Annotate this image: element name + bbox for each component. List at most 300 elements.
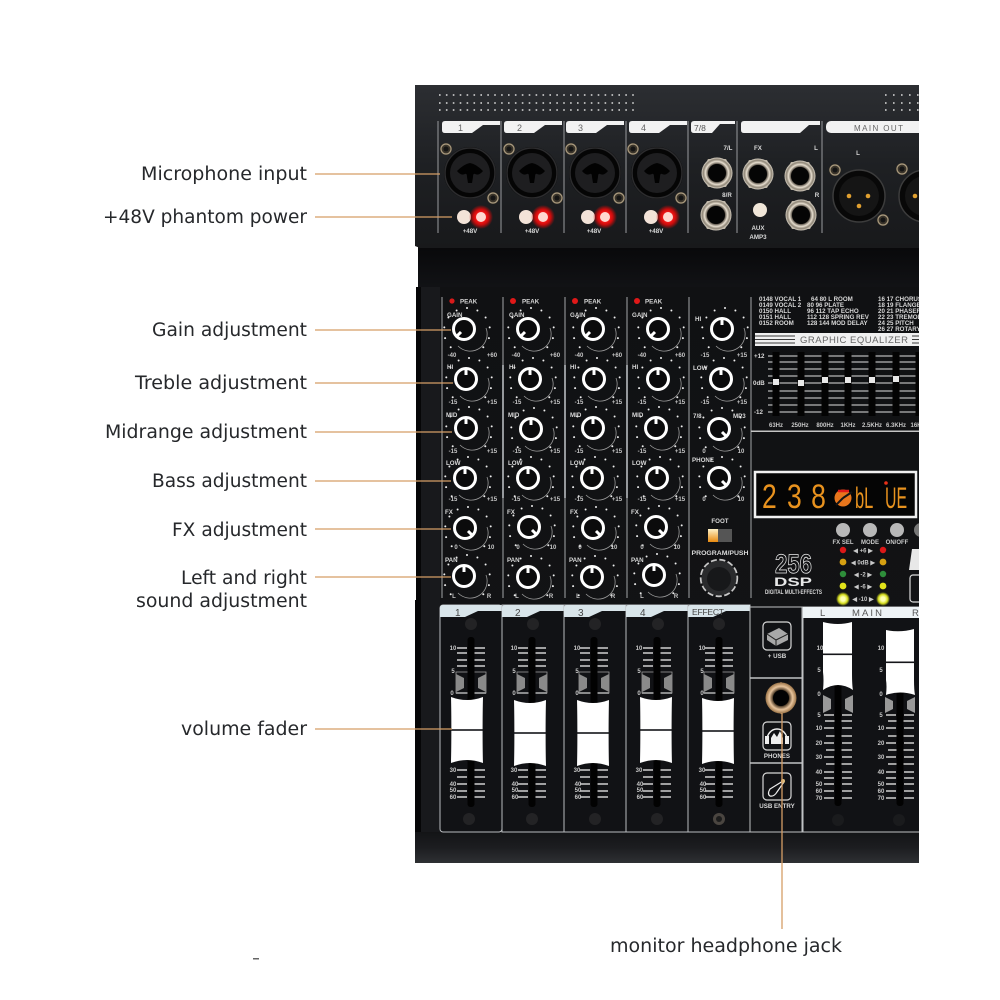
main tab [803,607,919,619]
fader strip 4: 5 [637,669,641,675]
knob: gain 2: +60 [550,353,561,359]
channel 2 input: 2 [517,123,522,133]
graphic equalizer heading: GRAPHIC EQUALIZER [800,335,908,346]
fader strip 2: 60 [512,795,519,801]
centre utility column [750,607,802,832]
effects preset list: 24 25 PITCH [878,320,914,327]
knob: pan 1: R [487,594,492,600]
knob: FX 1 [444,506,495,551]
level meter: ◀ -10 ▶ [851,596,874,603]
fader strip 1: 50 [450,788,457,794]
knob: FX 3: FX [570,509,579,516]
knob: gain 4: GAIN [632,312,648,319]
fader strip 1: 1 [455,608,461,619]
LED display: 238 [762,478,826,516]
knob: FX 2 [507,505,557,551]
effects preset list: 0150 HALL [759,308,791,315]
effect buttons [832,523,928,546]
callout label: Midrange adjustment: Midrange adjustment [105,422,307,443]
knob: treble 1: HI [447,364,453,371]
fader strip 4 [626,605,688,832]
fader strip effect: 60 [700,795,707,801]
256 DSP logo: DSP [774,575,812,589]
knob: bass 4 [632,456,686,503]
knob: FX 2: 10 [550,545,557,551]
left main fader: 70 [816,796,823,802]
fader strip 4: 60 [637,795,644,801]
peak LED 2: PEAK [522,298,540,306]
knob: mid 3 [570,406,623,455]
knob: mid 2: MID [508,412,520,419]
knob: pan 3: R [611,594,616,600]
callout label: Bass adjustment: Bass adjustment [152,471,307,492]
effect buttons: ON/OFF [886,540,909,546]
callout label: +48V phantom power: +48V phantom power [103,207,307,228]
knob: bass 3 [570,456,623,503]
program push encoder: PROGRAM/PUSH [692,550,749,557]
FX and auxiliary jacks: AMP3 [749,234,767,241]
right main fader: 50 [878,782,885,788]
FX and auxiliary jacks: AUX [751,225,765,232]
knob: mid 3: +15 [612,449,623,455]
graphic equalizer faders: 2.5KHz [862,423,882,429]
right main fader: 20 [878,741,885,747]
main tab: MAIN [852,608,882,619]
effect buttons: FX SEL [832,540,854,546]
knob: treble 4: -15 [638,400,647,406]
left main fader: 30 [816,755,823,761]
knob: effect low: LOW [693,365,708,372]
knob: 7/8 MP3: 10 [738,449,745,455]
256 DSP logo [765,549,822,596]
right edge icons [909,549,924,602]
knob: FX 1: 10 [488,545,495,551]
fader strip 4: 4 [640,608,646,619]
knob: FX 3: 0 [578,545,582,551]
knob: gain 1: GAIN [447,312,463,319]
knob: gain 3: +60 [612,353,623,359]
FX and auxiliary jacks [741,121,820,241]
fader strip 4: 40 [637,782,644,788]
effects preset list: 0148 VOCAL 1 [759,296,802,303]
main out XLR [826,121,951,226]
channel 3 input [565,121,625,235]
knob: treble 1: -15 [449,400,458,406]
fader strip 1: 60 [450,795,457,801]
fader strip 3: 30 [574,768,581,774]
knob: mid 1 [445,406,498,455]
level meter: ◀ -2 ▶ [853,572,872,578]
knob: pan 3: L [576,594,580,600]
graphic equalizer heading [755,333,919,346]
knob: FX 1: 0 [454,545,458,551]
knob: bass 2: LOW [508,460,523,467]
main tab: R [912,608,919,619]
effects preset list: 128 144 MOD DELAY [807,320,869,327]
level meter [836,547,890,606]
knob: bass 3: +15 [612,497,623,503]
main tab: L [820,608,825,619]
knob: bass 4: LOW [632,460,647,467]
knob: pan 2: L [515,594,519,600]
fader strip 3 [564,605,626,832]
knob: phones: PHONE [692,457,714,464]
left main fader [816,622,853,826]
fader strip 2: 2 [515,608,521,619]
knob: mid 4: -15 [638,449,647,455]
knob: gain 4: -40 [638,353,647,359]
knob: gain 3 [570,307,623,359]
knob: mid 2: -15 [513,449,522,455]
panel: left body edge [415,287,421,833]
mixer body [415,85,926,863]
graphic equalizer faders: 250Hz [791,423,809,429]
graphic equalizer faders: 0dB [753,380,765,387]
knob: effect low [693,357,748,406]
leader: phantom power [315,216,452,218]
fader cap 3 [577,700,609,766]
level meter: ◀ 0dB ▶ [850,560,875,566]
knob: treble 3: -15 [575,400,584,406]
leader: midrange [315,431,452,433]
fader strip 1: 40 [450,782,457,788]
knob: effect low: -15 [701,400,710,406]
graphic equalizer faders: 1KHz [840,423,856,429]
callout label: Left and right sound adjustment: sound adjustment [136,591,307,612]
knob: bass 3: -15 [575,497,584,503]
FX and auxiliary jacks: R [815,192,820,199]
knob: mid 4 [632,406,686,455]
fader strip 4: 0 [637,691,641,697]
effects preset list: 0152 ROOM [759,320,794,327]
channel 1 input [440,121,500,235]
right main fader: 40 [878,770,885,776]
leader: treble [315,382,453,384]
small stray mark [253,958,259,960]
channel 2 input [503,121,563,235]
panel: top connector panel [415,85,951,248]
knob: mid 4: +15 [675,449,686,455]
knob: pan 4: L [640,594,644,600]
effects preset list: 18 19 FLANGE [878,302,921,309]
fader cap effect [702,698,734,764]
knob: treble 3: +15 [612,400,623,406]
fader strip 2: 40 [512,782,519,788]
knob: treble 2: +15 [550,400,561,406]
knob: pan 3 [569,555,619,600]
fader strip 3: 10 [574,646,581,652]
256 DSP logo: DIGITAL MULTI-EFFECTS [765,589,822,596]
graphic equalizer faders: 800Hz [816,423,834,429]
right main fader: 10 [878,726,885,732]
knob: pan 2 [507,555,555,600]
leader lines [315,174,782,929]
fader cap 1 [451,697,483,763]
knob: FX 4: 0 [640,545,644,551]
knob: pan 2: R [549,594,554,600]
fader strip 2: 0 [512,691,516,697]
knob: pan 1: L [452,594,456,600]
knob: mid 1: -15 [449,449,458,455]
icon caption: USB: + USB [768,653,787,660]
fader strip effect: 10 [699,646,706,652]
fader strip 3: 3 [578,608,584,619]
callout label: volume fader: volume fader [181,719,307,740]
knob: gain 4: +60 [675,353,686,359]
channel 2 knobs [507,298,561,600]
knob: treble 3: HI [570,364,576,371]
knob: bass 3: LOW [570,460,585,467]
EQ divider [751,430,919,432]
fader cap 2 [514,700,546,766]
fader strip 3: 0 [575,691,579,697]
fader strip effect: EFFECT [692,607,724,617]
fader strip effect [688,605,750,832]
foot switch: FOOT [711,518,729,525]
knob: bass 4: -15 [638,497,647,503]
knob: phones: 10 [738,497,745,503]
fader strip 4: 10 [636,646,643,652]
fader strip effect: 5 [700,669,704,675]
fader strip 2: 30 [511,768,518,774]
channel 3 input: 3 [578,123,583,133]
left main fader: 0 [817,692,821,698]
knob: treble 2: HI [509,364,515,371]
right main fader: 5 [879,713,883,719]
fader strip 4: 30 [636,768,643,774]
knob: FX 2: FX [507,509,516,516]
knob: gain 2 [507,307,561,359]
left main fader: 10 [816,726,823,732]
level meter: ◀ -6 ▶ [853,584,872,590]
knob: mid 4: MID [632,412,644,419]
left main fader: 40 [816,770,823,776]
knob: FX 3: 10 [611,545,618,551]
graphic equalizer faders: 63Hz [769,423,783,429]
channel 4 knobs [631,298,686,600]
fader strip 1: 5 [451,669,455,675]
leader: headphone jack [781,713,783,929]
channel 1 input: 1 [458,123,463,133]
callout label: Left and right sound adjustment: Left and right [181,568,307,589]
knob: bass 2: +15 [550,497,561,503]
leader: pan [315,576,451,578]
effects preset list: 22 23 TREMOLO [878,314,926,321]
knob: bass 1: LOW [446,460,461,467]
right main fader: 5 [879,668,883,674]
effects preset list: 0151 HALL [759,314,791,321]
knob: gain 2: GAIN [509,312,525,319]
channel 2 input: +48V [525,228,540,235]
knob: mid 3: -15 [575,449,584,455]
program push encoder [692,550,749,596]
icon caption: phones: PHONES [764,753,790,760]
fader strip 1: 30 [450,768,457,774]
icon: mixer [763,622,791,650]
right main fader [878,629,915,826]
leader: volume fader [315,728,452,730]
knob: effect hi: +15 [737,353,748,359]
right main fader: 70 [878,796,885,802]
knob: mid 2: +15 [550,449,561,455]
panel: front lip [415,832,919,863]
7/8 line input: 7/L [724,145,733,152]
fader strip effect: 50 [700,788,707,794]
callout label: Treble adjustment: Treble adjustment [134,373,307,394]
main out XLR: L [856,150,860,157]
fader strip 1: 10 [450,646,457,652]
left main fader: 10 [817,646,824,652]
LED display: bL [855,482,873,515]
left main fader: 5 [817,713,821,719]
level meter: ◀ +6 ▶ [852,548,873,554]
FX and auxiliary jacks: FX [754,145,763,152]
knob: effect low: +15 [737,400,748,406]
left main fader: 50 [816,782,823,788]
leader: bass [315,480,451,482]
fader strip 3: 50 [575,788,582,794]
knob: treble 1 [445,357,498,406]
channel 4 input: +48V [649,228,664,235]
knob: gain 3: GAIN [570,312,586,319]
leader: FX [315,528,451,530]
FX and auxiliary jacks: L [814,145,818,152]
7/8 line input: 8/R [722,192,732,199]
main faders [803,607,933,832]
knob: bass 1: +15 [487,497,498,503]
fader cap 4 [640,697,672,763]
leader: microphone input [315,173,440,175]
knob: mid 2 [508,407,561,455]
icon: headphones [763,722,791,750]
fader cap L [823,622,853,690]
fader strip 3: 60 [575,795,582,801]
graphic equalizer faders: 16K [910,423,922,429]
callout label: Gain adjustment: Gain adjustment [152,320,307,341]
knob: FX 4: FX [631,509,640,516]
left main fader: 60 [816,789,823,795]
effects preset list: 112 128 SPRING REV [807,314,870,321]
knob: treble 1: +15 [487,400,498,406]
knob: 7/8 MP3: 0 [702,449,706,455]
knob: pan 2: PAN [507,557,520,564]
callout label: monitor headphone jack: monitor headphone jack [610,936,842,957]
peak LED 4 [634,298,663,306]
knob: gain 1: +60 [487,353,498,359]
channel 4 input [627,121,687,235]
foot switch [708,518,732,542]
panel: main control face [416,287,919,833]
channel 1 input: +48V [463,228,478,235]
knob: FX 1: FX [445,509,454,516]
fader strip 2: 5 [512,669,516,675]
peak LED 2 [510,298,540,306]
channel 1 knobs [443,298,498,600]
fader strip 2: 50 [512,788,519,794]
graphic equalizer faders: +12 [754,353,765,360]
knob: treble 4 [632,357,686,406]
knob: gain 2: -40 [512,353,521,359]
knob: FX 4 [631,505,683,551]
knob: 7/8 MP3: 7/8 [693,413,702,420]
knob: pan 1 [443,554,492,600]
knob: gain 4 [632,307,686,359]
knob: treble 3 [570,357,623,406]
fader strip 3: 5 [575,669,579,675]
knob: 7/8 MP3: MP3 [733,413,746,420]
knob: treble 4: HI [632,364,638,371]
fader strip 2 [502,605,564,832]
knob: bass 4: +15 [675,497,686,503]
knob: gain 1 [443,307,498,359]
knob: bass 2 [507,456,561,503]
panel: rear gap [418,245,919,290]
icon caption: USB entry: USB ENTRY [759,803,796,810]
256 DSP logo: 256 [775,549,812,579]
left main fader: 20 [816,741,823,747]
knob: FX 4: 10 [674,545,681,551]
left main fader: 5 [817,668,821,674]
effects preset list: 0149 VOCAL 2 [759,302,802,309]
effects preset list: 80 96 PLATE [807,302,844,309]
knob: gain 1: -40 [448,353,457,359]
main out XLR: MAIN OUT [854,124,903,133]
knob: treble 2: -15 [513,400,522,406]
fader strip 1 [440,605,502,832]
fader strip 1: 0 [450,691,454,697]
channel 3 knobs [569,298,623,600]
fader strip 4: 50 [637,788,644,794]
peak LED 1 [449,298,478,306]
knob: 7/8 MP3 [693,407,746,455]
peak LED 3 [572,298,602,306]
7/8 line input [691,121,735,230]
graphic equalizer faders: -12 [754,409,764,416]
peak LED 4: PEAK [645,298,663,306]
fader strip effect: 30 [699,768,706,774]
knob: bass 1: -15 [449,497,458,503]
callout label: Microphone input: Microphone input [141,164,307,185]
knob: treble 2 [509,357,561,406]
effects preset list: 16 17 CHORUS [878,296,922,303]
channel 4 input: 4 [641,123,646,133]
knob: gain 3: -40 [575,353,584,359]
peak LED 3: PEAK [584,298,602,306]
effects preset list: 96 112 TAP ECHO [807,308,859,315]
callout label: Left and right sound adjustment [136,568,307,612]
right main fader: 0 [879,692,883,698]
channel 3 input: +48V [587,228,602,235]
peak LED 1: PEAK [460,298,478,306]
right main fader: 30 [878,755,885,761]
graphic equalizer faders: 6.3KHz [886,423,906,429]
fader strip effect: 40 [700,782,707,788]
knob: mid 1: +15 [487,449,498,455]
knob: pan 3: PAN [569,557,582,564]
callout label: FX adjustment: FX adjustment [172,520,307,541]
effect channel controls [692,307,749,596]
fader strip 2: 10 [511,646,518,652]
knob: bass 1 [444,456,498,503]
knob: FX 2: 0 [516,545,520,551]
knob: effect hi [695,307,749,359]
leader: gain [315,329,451,331]
graphic equalizer faders [753,352,922,429]
knob: FX 3 [570,506,620,551]
right main fader: 10 [878,646,885,652]
icon: guitar [763,773,791,800]
effects preset list: 64 80 L ROOM [811,296,853,303]
